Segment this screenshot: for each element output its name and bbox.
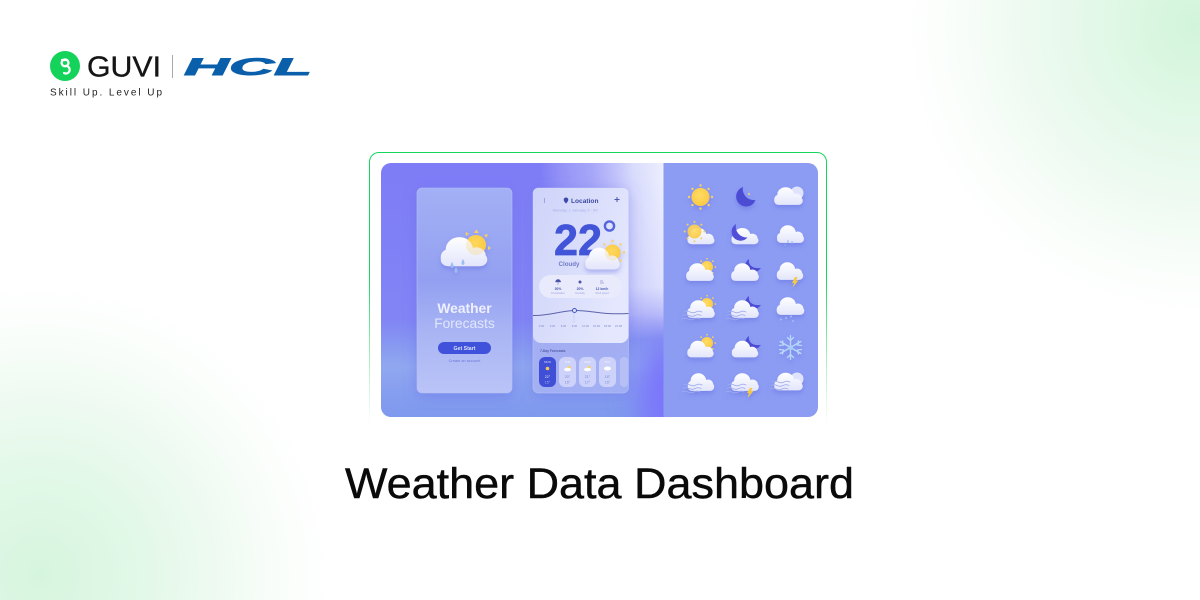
condition label: Cloudy (559, 261, 580, 268)
forecast card: Wednesday: WED (584, 360, 591, 364)
icon: GUVI badge (50, 51, 80, 81)
title: Weather Data Dashboard (345, 460, 854, 508)
panel: app screens backdrop (381, 163, 664, 417)
metrics pill (539, 275, 622, 298)
panel: forecast detail screen (533, 188, 628, 393)
forecast card: Wednesday: 21° (585, 375, 591, 379)
icon: moon and cloud (732, 224, 758, 244)
dashboard illustration (381, 163, 818, 417)
hourly temperature line chart (533, 308, 628, 328)
icon: snowflake (780, 336, 802, 360)
link: create an account: Create an account (449, 358, 481, 363)
forecast card: Monday (539, 357, 556, 387)
forecast card: Thursday: 15° (605, 380, 611, 384)
temperature reading (555, 220, 616, 256)
forecast card: Thursday: THU (605, 360, 610, 364)
temperature reading: 22 (554, 216, 602, 265)
header: location: Monday, 1 January 9 : 00 (553, 208, 598, 212)
icon: cloud and sun (585, 240, 625, 270)
forecast card: Wednesday (579, 357, 596, 387)
hourly temperature line chart: 3:00 (550, 324, 556, 328)
icon: light rain (777, 225, 804, 246)
icon: crescent moon (736, 187, 756, 206)
forecast card: Tuesday (559, 357, 576, 387)
wordmark: HCL: HCL (184, 54, 312, 81)
forecast card: Tuesday: 15° (565, 380, 571, 384)
image frame (370, 152, 826, 425)
hourly temperature line chart: 15:00 (593, 324, 600, 328)
panel: weather forecasts splash screen (417, 188, 512, 393)
icon: fog with lightning (726, 373, 759, 398)
forecast card: Wednesday: 17° (585, 380, 591, 384)
forecast card: Thursday: 18° (605, 375, 611, 379)
metrics pill: Wind speed (595, 292, 609, 295)
icon: fog with sun (682, 295, 716, 320)
hourly temperature line chart: 0:00 (539, 324, 545, 328)
hourly temperature line chart: 9:00 (572, 324, 578, 328)
wordmark: GUVI: GUVI (87, 52, 161, 84)
heading: Weather: Weather (437, 301, 492, 316)
hourly temperature line chart: 6:00 (561, 324, 567, 328)
icon: snow flurries (777, 297, 804, 322)
metrics pill: Precipitation (551, 292, 565, 295)
icon: fog with drizzle (682, 373, 714, 393)
icon: fog with moon (726, 296, 761, 320)
metrics pill: Humidity (575, 292, 586, 295)
forecast card: Thursday (599, 357, 616, 387)
forecast card: Tuesday: 20° (565, 375, 571, 379)
heading: Forecasts: Forecasts (434, 316, 495, 331)
icon: sun behind cloud (686, 258, 716, 281)
heading: 7-day forecasts: 7-Day Forecasts (540, 349, 566, 353)
button: Get Start: Get Start (454, 346, 476, 352)
forecast card: Monday: MON (544, 360, 551, 364)
hourly temperature line chart: 21:00 (615, 324, 622, 328)
hourly temperature line chart: 18:00 (604, 324, 611, 328)
header: location: Location (571, 198, 598, 205)
forecast card: Friday partial (620, 357, 628, 387)
hourly temperature line chart: 12:00 (582, 324, 589, 328)
icon: moon behind cloud (731, 259, 761, 281)
forecast card: Monday: 22° (545, 375, 551, 379)
header: location (544, 197, 620, 212)
icon: sunny intervals (684, 221, 714, 244)
icon: sun (688, 184, 713, 210)
metrics pill: 20% (577, 287, 583, 291)
icon: thunderstorm (777, 262, 803, 288)
forecast card: Monday: 15° (545, 380, 551, 384)
forecast card: Tuesday: TUE (565, 360, 570, 364)
icon: cloudy (774, 186, 804, 205)
icon: moon with showers (732, 336, 761, 359)
icon: cloud with sun and rain (441, 230, 491, 273)
metrics pill: 12 km/h (596, 287, 608, 291)
metrics pill: 30% (555, 287, 561, 291)
panel: weather icon set (664, 157, 826, 423)
button: Get Start (438, 342, 491, 354)
icon: fog with heavy cloud (770, 372, 804, 390)
tagline: Skill Up. Level Up (50, 88, 162, 98)
icon: sun with showers (687, 334, 716, 359)
logo: GUVI HCL (50, 51, 312, 98)
